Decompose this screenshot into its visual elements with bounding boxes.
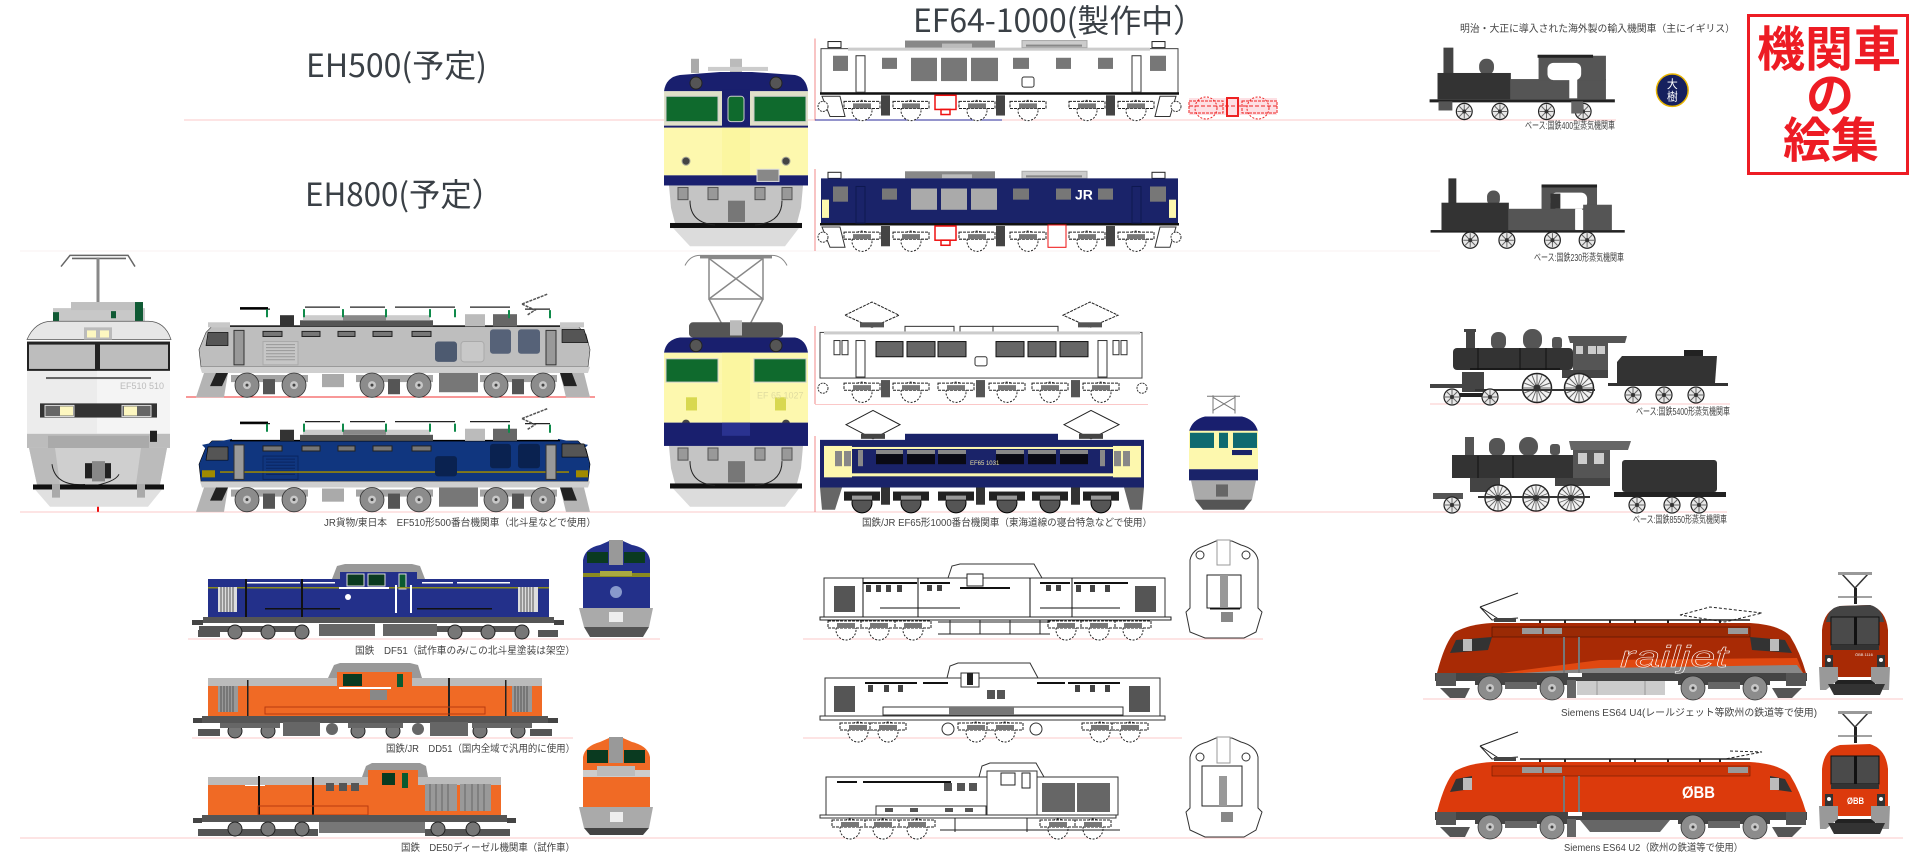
badge: 大樹: 大 <box>1667 76 1678 92</box>
caption: imported locomotives: 明治・大正に導入された海外製の輸入機関車（主にイギリス） <box>1460 22 1735 35</box>
EF510 silver side view <box>196 294 590 397</box>
heading: EH500: EH500(予定) <box>306 41 487 87</box>
DE50 orange front view <box>579 737 653 835</box>
caption: 230: ベース:国鉄230形蒸気機関車 <box>1534 251 1624 264</box>
EF510 front view: EF510 510 <box>120 381 164 391</box>
EF64 navy side view <box>818 171 1181 251</box>
ES64 U4 railjet side view <box>1435 593 1807 700</box>
caption: ES64 U2: Siemens ES64 U2（欧州の鉄道等で使用） <box>1564 841 1743 854</box>
steam loco 230 <box>1431 178 1625 248</box>
steam loco tender type <box>1433 437 1726 513</box>
caption: EF510: JR貨物/東日本 EF510形500番台機関車（北斗星などで使用） <box>324 516 596 529</box>
caption: ES64 U4: Siemens ES64 U4(レールジェット等欧州の鉄道等で使用) <box>1561 706 1817 719</box>
ES64 U2 front view <box>1819 711 1890 834</box>
DD51 outline side view <box>820 663 1165 742</box>
DF51 blue front view <box>579 540 653 637</box>
DE50 orange side view <box>193 763 516 836</box>
caption: EF65: 国鉄/JR EF65形1000番台機関車（東海道線の寝台特急などで使用） <box>862 516 1152 529</box>
title box <box>1748 16 1908 174</box>
red outline small locomotive <box>1189 97 1277 119</box>
DF51 outline side view <box>820 564 1171 640</box>
DE50 outline side view <box>820 763 1120 839</box>
EF510 blue side view <box>196 408 590 512</box>
caption: 5400: ベース:国鉄5400形蒸気機関車 <box>1636 405 1730 418</box>
EF65 front view <box>664 255 808 507</box>
EF510 front view <box>27 255 171 512</box>
EF65 small front view <box>1189 395 1258 510</box>
EF65 coloured side view: EF65 1031 <box>970 461 1000 467</box>
DE50 outline front view <box>1186 737 1262 837</box>
title box: 絵集 <box>1783 115 1879 168</box>
caption: DD51: 国鉄/JR DD51（国内全域で汎用的に使用） <box>386 742 575 755</box>
steam loco 5400 <box>1430 329 1728 405</box>
DF51 outline front view <box>1186 540 1262 638</box>
EF65 front view: EF 65 1027 <box>757 390 803 400</box>
ES64 U2 OBB side view: ØBB <box>1682 783 1715 802</box>
caption: 400: ベース:国鉄400型蒸気機関車 <box>1525 119 1615 132</box>
ES64 U2 front view: ØBB <box>1847 796 1864 806</box>
heading: EH800: EH800(予定） <box>305 170 503 216</box>
badge: 大樹: 樹 <box>1667 88 1678 104</box>
caption: tender type: ベース:国鉄8550形蒸気機関車 <box>1633 513 1727 526</box>
ES64 U4 railjet side view: railjet <box>1620 639 1730 674</box>
DF51 blue side view <box>192 564 564 639</box>
caption: DE50: 国鉄 DE50ディーゼル機関車（試作車） <box>401 841 575 854</box>
title box: 機関車 <box>1757 24 1901 77</box>
EF64 front view <box>664 59 808 246</box>
ES64 U2 OBB side view <box>1435 732 1807 839</box>
EF65 coloured side view <box>820 410 1144 513</box>
DD51 orange side view <box>193 663 558 738</box>
caption: DF51: 国鉄 DF51（試作車のみ/この北斗星塗装は架空） <box>355 644 575 657</box>
steam loco 400 <box>1430 48 1615 120</box>
EF64 outline side view <box>818 41 1181 121</box>
badge: 大樹 <box>1656 74 1688 106</box>
ES64 U4 front view <box>1819 572 1890 695</box>
ES64 U4 front view: ÖBB 1116 <box>1855 652 1874 657</box>
title box: の <box>1806 70 1854 123</box>
EF64 navy side view: JR <box>1075 187 1093 203</box>
EF65 outline side view <box>818 302 1147 402</box>
